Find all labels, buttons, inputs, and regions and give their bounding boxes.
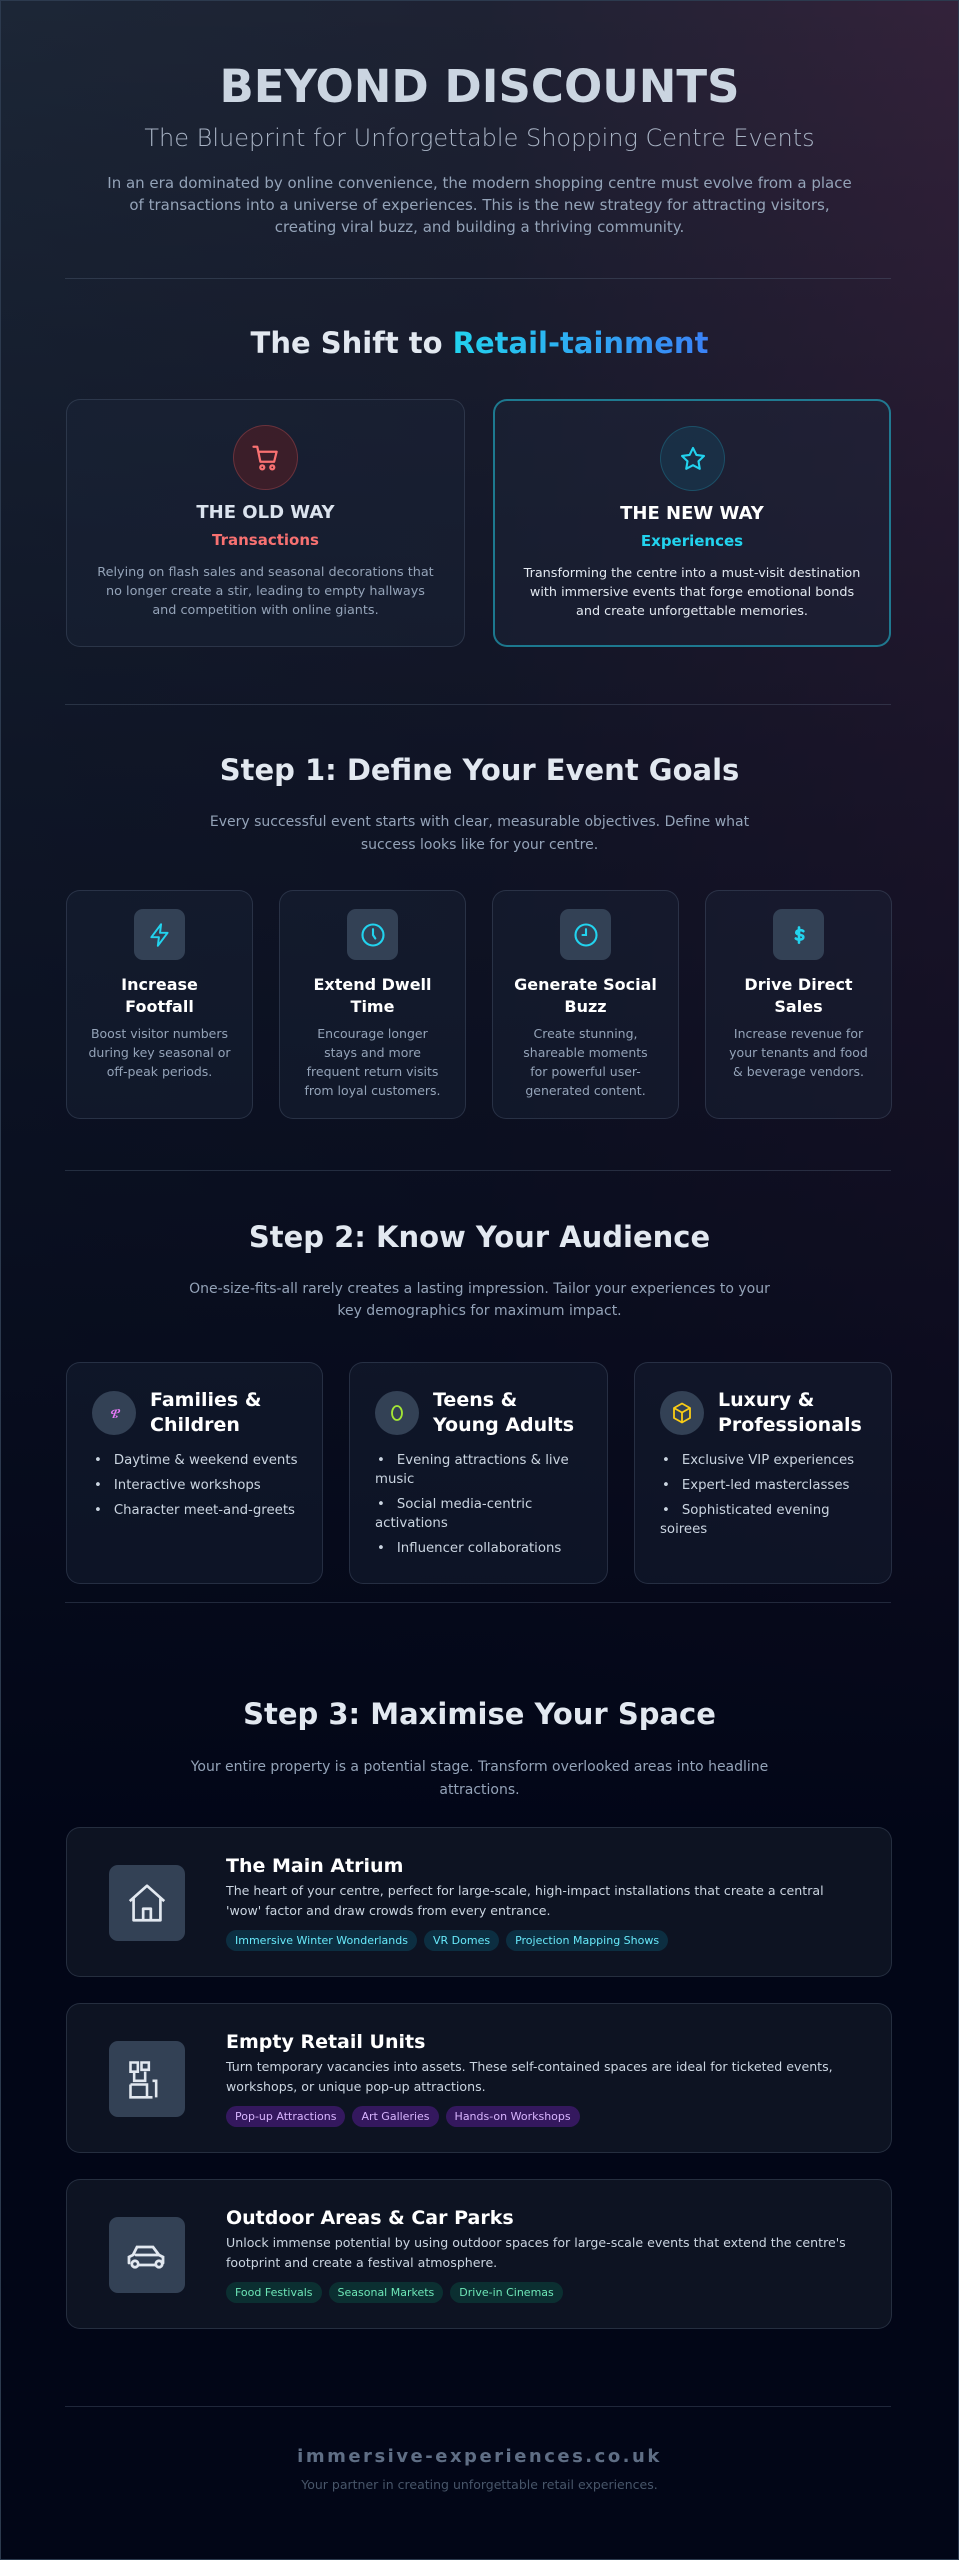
heading: step 3: Step 3: Maximise Your Space xyxy=(243,1697,716,1731)
icon: families: ዌ xyxy=(109,1403,119,1422)
tags xyxy=(226,2106,580,2127)
panel: families: Daytime & weekend events xyxy=(114,1453,298,1468)
icon: car xyxy=(109,2217,185,2293)
panel: luxury: Sophisticated evening soirees xyxy=(660,1503,830,1537)
panel: outdoor areas: Outdoor Areas & Car Parks xyxy=(226,2207,514,2229)
panel: teens xyxy=(349,1362,608,1584)
tags: Immersive Winter Wonderlands xyxy=(235,1934,408,1947)
icon: house xyxy=(109,1865,185,1941)
footer xyxy=(297,2446,662,2492)
panel: goal direct sales xyxy=(705,890,892,1119)
panel: empty retail units: Turn temporary vacancies into assets. These self-contained spaces are ideal for ticketed events, workshops, or unique pop-up attractions. xyxy=(226,2059,833,2094)
panel: goal social buzz: Create stunning, xyxy=(534,1026,638,1041)
icon: star xyxy=(660,426,725,491)
text: Relying on flash sales and seasonal decorations that no longer create a stir, leading to empty hallways and competition with online giants. xyxy=(97,565,434,618)
panel: goal direct sales: Drive Direct xyxy=(744,975,853,994)
panel: old way: Transactions xyxy=(212,531,319,549)
heading: shift to retail-tainment: The Shift to Retail-tainment xyxy=(251,326,708,360)
tags: Seasonal Markets xyxy=(338,2286,434,2299)
heading: THE NEW WAY xyxy=(620,503,764,524)
panel: goal social buzz: generated content. xyxy=(525,1083,646,1098)
footer: immersive-experiences.co.uk xyxy=(297,2446,662,2467)
panel: goal dwell time xyxy=(279,890,466,1119)
panel: luxury: Professionals xyxy=(718,1414,862,1436)
panel: families: Character meet-and-greets xyxy=(114,1503,295,1518)
panel: new way: Experiences xyxy=(641,532,743,550)
panel: goal social buzz xyxy=(492,890,679,1119)
panel: goal social buzz: Generate Social xyxy=(514,975,657,994)
panel: main atrium: The Main Atrium xyxy=(226,1855,403,1877)
panel: goal dwell time: Encourage longer xyxy=(317,1026,428,1041)
panel: goal social buzz: for powerful user- xyxy=(530,1064,641,1079)
tags: Drive-in Cinemas xyxy=(459,2286,554,2299)
icon: dollar xyxy=(773,909,824,960)
tags: Pop-up Attractions xyxy=(235,2110,336,2123)
panel: goal social buzz: shareable moments xyxy=(523,1045,648,1060)
icon: cart xyxy=(233,425,298,490)
panel: goal footfall: Footfall xyxy=(125,997,194,1016)
icon: families xyxy=(92,1391,136,1435)
step 2 intro: One-size-fits-all rarely creates a lasting impression. Tailor your experiences to your key demographics for maximum impact. xyxy=(189,1281,770,1319)
panel: luxury: Expert-led masterclasses xyxy=(682,1478,849,1493)
panel: goal dwell time: frequent return visits xyxy=(307,1064,438,1079)
panel: outdoor areas: Unlock immense potential by using outdoor spaces for large-scale events that extend the centre's footprint and create a festival atmosphere. xyxy=(226,2235,846,2270)
footer: Your partner in creating unforgettable retail experiences. xyxy=(301,2477,658,2492)
panel: luxury: Exclusive VIP experiences xyxy=(682,1453,854,1468)
panel: goal footfall xyxy=(66,890,253,1119)
tags: VR Domes xyxy=(433,1934,490,1947)
panel: main atrium: The heart of your centre, perfect for large-scale, high-impact installations that create a central 'wow' factor and draw crowds from every entrance. xyxy=(226,1883,824,1918)
panel: goal direct sales: Increase revenue for your tenants and food & beverage vendors. xyxy=(729,1026,868,1079)
panel: empty retail units xyxy=(66,2003,892,2153)
subtitle: The Blueprint for Unforgettable Shopping Centre Events xyxy=(144,124,815,152)
panel: main atrium xyxy=(66,1827,892,1977)
heading: THE OLD WAY xyxy=(196,502,335,523)
tags xyxy=(226,1930,668,1951)
step 3 intro: Your entire property is a potential stage. Transform overlooked areas into headline attractions. xyxy=(191,1759,768,1798)
panel: empty retail units: Empty Retail Units xyxy=(226,2031,425,2053)
panel: goal dwell time: from loyal customers. xyxy=(304,1083,441,1098)
panel: teens: Influencer collaborations xyxy=(397,1541,561,1556)
step 1 intro: Every successful event starts with clear, measurable objectives. Define what success looks like for your centre. xyxy=(210,814,749,853)
icon: bolt xyxy=(134,909,185,960)
panel: luxury xyxy=(634,1362,892,1584)
tags: Projection Mapping Shows xyxy=(515,1934,659,1947)
panel: goal dwell time: Time xyxy=(351,997,394,1016)
heading: step 2: Step 2: Know Your Audience xyxy=(249,1220,710,1254)
panel: families xyxy=(66,1362,323,1584)
icon: units xyxy=(109,2041,185,2117)
panel: goal footfall: Increase xyxy=(121,975,198,994)
tags: Hands-on Workshops xyxy=(455,2110,571,2123)
panel: goal footfall: Boost visitor numbers during key seasonal or off-peak periods. xyxy=(88,1026,230,1079)
panel: families: Interactive workshops xyxy=(114,1478,261,1493)
text: Transforming the centre into a must-visit destination with immersive events that forge emotional bonds and create unforgettable memories. xyxy=(524,566,860,619)
tags: Art Galleries xyxy=(361,2110,430,2123)
panel: goal dwell time: Extend Dwell xyxy=(313,975,432,994)
tags: Food Festivals xyxy=(235,2286,313,2299)
panel: families: Children xyxy=(150,1414,240,1436)
panel: goal direct sales: Sales xyxy=(774,997,823,1016)
icon: teens xyxy=(375,1391,419,1435)
panel: new way xyxy=(493,399,891,647)
panel: teens: Teens & xyxy=(433,1389,517,1411)
icon: timer xyxy=(560,909,611,960)
panel: outdoor areas xyxy=(66,2179,892,2329)
title: BEYOND DISCOUNTS xyxy=(219,60,740,113)
panel: teens: Young Adults xyxy=(433,1414,574,1436)
tags xyxy=(226,2282,563,2303)
panel: teens: Social media-centric activations xyxy=(375,1497,532,1531)
panel: goal social buzz: Buzz xyxy=(564,997,607,1016)
panel: teens: Evening attractions & live music xyxy=(375,1453,569,1487)
intro paragraph: In an era dominated by online convenience, the modern shopping centre must evolve from a place of transactions into a universe of experiences. This is the new strategy for attracting visitors, creating viral buzz, and building a thriving community. xyxy=(107,174,852,236)
icon: clock xyxy=(347,909,398,960)
panel: old way xyxy=(66,399,465,647)
panel: luxury: Luxury & xyxy=(718,1389,814,1411)
icon: gem box xyxy=(660,1391,704,1435)
heading: step 1: Step 1: Define Your Event Goals xyxy=(220,753,739,787)
panel: families: Families & xyxy=(150,1389,261,1411)
panel: goal dwell time: stays and more xyxy=(324,1045,421,1060)
